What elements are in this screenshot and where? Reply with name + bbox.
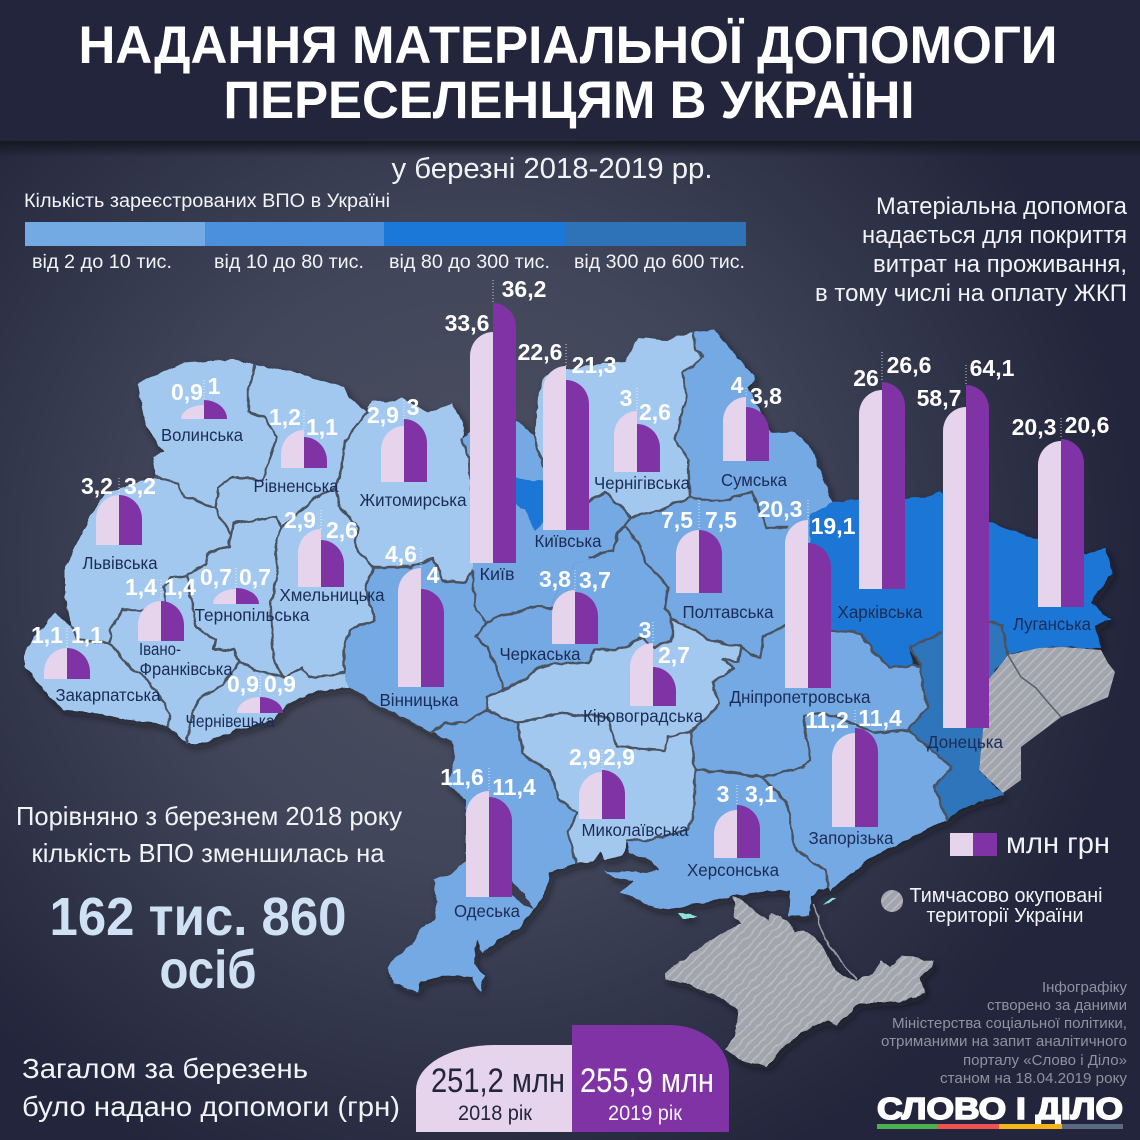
chart: Херсонська [687, 781, 779, 880]
chart: Київ: 36,2 [502, 276, 546, 302]
chart: Хмельницька: Хмельницька [280, 585, 385, 605]
chart: Миколаївська: Миколаївська [582, 820, 689, 840]
source credits: Інфографіку [1042, 979, 1127, 996]
text block: purpose of aid: Матеріальна допомога [876, 193, 1128, 220]
chart: Одеська: 11,6 [440, 764, 484, 790]
legend: occupied territories: Тимчасово окуповані [910, 885, 1102, 907]
chart: Хмельницька: 2,6 [326, 517, 358, 543]
chart: Вінницька: 4,6 [385, 541, 417, 567]
chart: Харківська: Харківська [838, 602, 923, 622]
chart: Рівненська [254, 404, 339, 496]
legend: registered IDP count [24, 191, 746, 273]
map of Ukraine [25, 330, 1112, 993]
occupied territories: Crimea [665, 897, 933, 1067]
chart: Івано-Франківська [125, 574, 233, 679]
chart: Закарпатська [31, 622, 161, 705]
chart: Вінницька [380, 541, 459, 710]
subtitle: у березні 2018-2019 рр. [392, 153, 712, 185]
source credits: станом на 18.04.2019 року [940, 1070, 1127, 1087]
chart: Волинська: 1 [208, 373, 221, 399]
chart: Житомирська: Житомирська [360, 490, 467, 510]
logo: Слово і Діло: СЛОВО І ДІЛО [877, 1091, 1123, 1126]
legend: occupied territories: території України [926, 905, 1084, 927]
title: НАДАННЯ МАТЕРІАЛЬНОЇ ДОПОМОГИ [78, 16, 1058, 75]
text block: purpose of aid: надається для покриття [862, 222, 1127, 249]
chart: Івано-Франківська: Івано- [139, 639, 181, 659]
title: ПЕРЕСЕЛЕНЦЯМ В УКРАЇНІ [224, 71, 914, 130]
chart: Полтавська: Полтавська [682, 602, 774, 622]
legend: occupied territories [881, 885, 1102, 927]
chart: Дніпропетровська: 20,3 [758, 496, 802, 522]
chart: Харківська [838, 352, 931, 622]
legend: registered IDP count: Кількість зареєстрованих ВПО в Україні [24, 191, 390, 212]
chart: Львівська: 3,2 [124, 473, 156, 499]
chart: Запорізька: Запорізька [808, 828, 894, 848]
chart: Рівненська: 1,2 [269, 404, 301, 430]
chart: Волинська: Волинська [161, 425, 243, 445]
chart: Одеська: 11,4 [492, 774, 536, 800]
chart: Луганська: 20,3 [1012, 414, 1056, 440]
chart: Харківська: 26 [853, 365, 879, 391]
chart: Кіровоградська: 3 [639, 617, 651, 643]
chart: Запорізька: 11,2 [805, 707, 849, 733]
chart: Київська: 21,3 [572, 352, 616, 378]
text block: purpose of aid [815, 193, 1128, 307]
total chart: 2018 vs 2019: 255,9 млн [580, 1062, 714, 1100]
legend: million UAH [950, 827, 1110, 860]
chart: Херсонська: Херсонська [687, 860, 779, 880]
chart: Чернівецька: 0,9 [227, 671, 259, 697]
chart: Донецька [917, 355, 1015, 752]
chart: Волинська [161, 373, 243, 445]
chart: Київ: 33,6 [445, 310, 489, 336]
chart: Чернігівська: 3 [620, 385, 632, 411]
chart: Запорізька: 11,4 [858, 705, 902, 731]
chart: Львівська: Львівська [82, 553, 158, 573]
chart: Херсонська: 3,1 [745, 781, 777, 807]
chart: Житомирська: 2,9 [367, 402, 399, 428]
total chart: 2018 vs 2019 [416, 1025, 729, 1132]
chart: Дніпропетровська: Дніпропетровська [730, 687, 871, 707]
legend: registered IDP count: від 300 до 600 тис. [574, 252, 745, 273]
big number: decrease in IDPs: осіб [160, 940, 256, 1000]
chart: Черкаська: 3,7 [579, 567, 611, 593]
chart: Запорізька [805, 705, 902, 848]
total chart: 2018 vs 2019: 2019 рік [608, 1102, 683, 1125]
text block: IDP decrease [16, 801, 402, 868]
chart: Закарпатська: Закарпатська [56, 685, 161, 705]
chart: Житомирська: 3 [407, 394, 419, 420]
chart: Волинська: 0,9 [171, 379, 203, 405]
chart: Тернопільська: Тернопільська [194, 605, 310, 625]
chart: Київська [518, 339, 616, 551]
chart: Івано-Франківська: Франківська [140, 659, 233, 679]
chart: Рівненська: Рівненська [254, 476, 339, 496]
chart: Кіровоградська: 2,7 [658, 642, 690, 668]
source credits: порталу «Слово і Діло» [963, 1052, 1127, 1069]
chart: Чернівецька [186, 671, 296, 731]
text block: IDP decrease: кількість ВПО зменшилась на [32, 838, 385, 868]
chart: Сумська [721, 372, 787, 490]
chart: Полтавська [661, 500, 774, 622]
text block: purpose of aid: витрат на проживання, [873, 251, 1127, 278]
chart: Житомирська [360, 394, 467, 510]
total chart: 2018 vs 2019: 2018 рік [458, 1102, 533, 1125]
chart: Київська: 22,6 [518, 339, 562, 365]
chart: Дніпропетровська [730, 496, 871, 707]
text block: total aid: Загалом за березень [22, 1053, 308, 1084]
chart: Тернопільська: 0,7 [239, 564, 271, 590]
total chart: 2018 vs 2019: 251,2 млн [431, 1062, 565, 1100]
chart: Закарпатська: 1,1 [31, 622, 63, 648]
chart: Херсонська: 3 [717, 781, 729, 807]
text block: total aid [22, 1053, 400, 1122]
chart: Сумська: 4 [731, 372, 744, 398]
chart: Сумська: Сумська [721, 470, 787, 490]
chart: Полтавська: 7,5 [661, 507, 693, 533]
chart: Чернігівська [594, 385, 690, 493]
chart: Тернопільська [194, 564, 310, 625]
chart: Чернігівська: 2,6 [639, 399, 671, 425]
chart: Донецька: Донецька [927, 732, 1003, 752]
chart: Черкаська: Черкаська [500, 644, 581, 664]
text block: IDP decrease: Порівняно з березнем 2018 року [16, 801, 402, 831]
chart: Київ: Київ [480, 564, 514, 584]
chart: Кіровоградська [583, 617, 703, 726]
source credits: Міністерства соціальної політики, [892, 1015, 1127, 1032]
chart: Львівська [81, 473, 158, 573]
source credits: отриманими на запит аналітичного [881, 1033, 1127, 1050]
legend: registered IDP count: від 10 до 80 тис. [214, 252, 364, 273]
chart: Донецька: 64,1 [970, 355, 1015, 381]
chart: Вінницька: Вінницька [380, 690, 459, 710]
chart: Миколаївська: 2,9 [569, 744, 601, 770]
chart: Миколаївська [569, 744, 689, 840]
chart: Черкаська: 3,8 [539, 566, 571, 592]
header band [0, 0, 1140, 157]
chart: Черкаська [500, 566, 611, 664]
chart: Івано-Франківська: 1,4 [125, 574, 157, 600]
chart: Івано-Франківська: 1,4 [164, 574, 196, 600]
big number: decrease in IDPs [50, 887, 346, 1000]
chart: Луганська: Луганська [1013, 614, 1091, 634]
source credits: створено за даними [987, 997, 1127, 1014]
source credits [881, 979, 1127, 1087]
legend: registered IDP count: від 2 до 10 тис. [32, 252, 172, 273]
chart: Кіровоградська: Кіровоградська [583, 706, 703, 726]
occupied territories: Donbas [979, 647, 1115, 793]
chart: Одеська [440, 764, 536, 921]
chart: Сумська: 3,8 [750, 383, 782, 409]
chart: Луганська: 20,6 [1065, 412, 1109, 438]
chart: Полтавська: 7,5 [705, 507, 737, 533]
chart: Львівська: 3,2 [81, 473, 113, 499]
chart: Чернівецька: Чернівецька [186, 711, 275, 731]
text block: purpose of aid: в тому числі на оплату ЖКП [815, 280, 1127, 307]
chart: Донецька: 58,7 [917, 385, 961, 411]
chart: Дніпропетровська: 19,1 [811, 513, 856, 539]
chart: Закарпатська: 1,1 [71, 622, 103, 648]
text block: total aid: було надано допомоги (грн) [22, 1091, 400, 1122]
chart: Хмельницька [280, 507, 385, 605]
chart: Одеська: Одеська [454, 901, 520, 921]
legend: million UAH: млн грн [1006, 827, 1110, 860]
chart: Тернопільська: 0,7 [200, 564, 232, 590]
legend: registered IDP count: від 80 до 300 тис. [389, 252, 550, 273]
chart: Київ [445, 276, 546, 584]
chart: Чернівецька: 0,9 [264, 671, 296, 697]
title [78, 16, 1058, 130]
chart: Луганська [1012, 412, 1109, 634]
big number: decrease in IDPs: 162 тис. 860 [50, 887, 346, 947]
chart: Вінницька: 4 [427, 562, 440, 588]
chart: Миколаївська: 2,9 [603, 744, 635, 770]
chart: Київська: Київська [534, 531, 602, 551]
chart: Чернігівська: Чернігівська [594, 473, 690, 493]
chart: Харківська: 26,6 [887, 352, 931, 378]
chart: Хмельницька: 2,9 [284, 507, 316, 533]
chart: Рівненська: 1,1 [306, 414, 338, 440]
